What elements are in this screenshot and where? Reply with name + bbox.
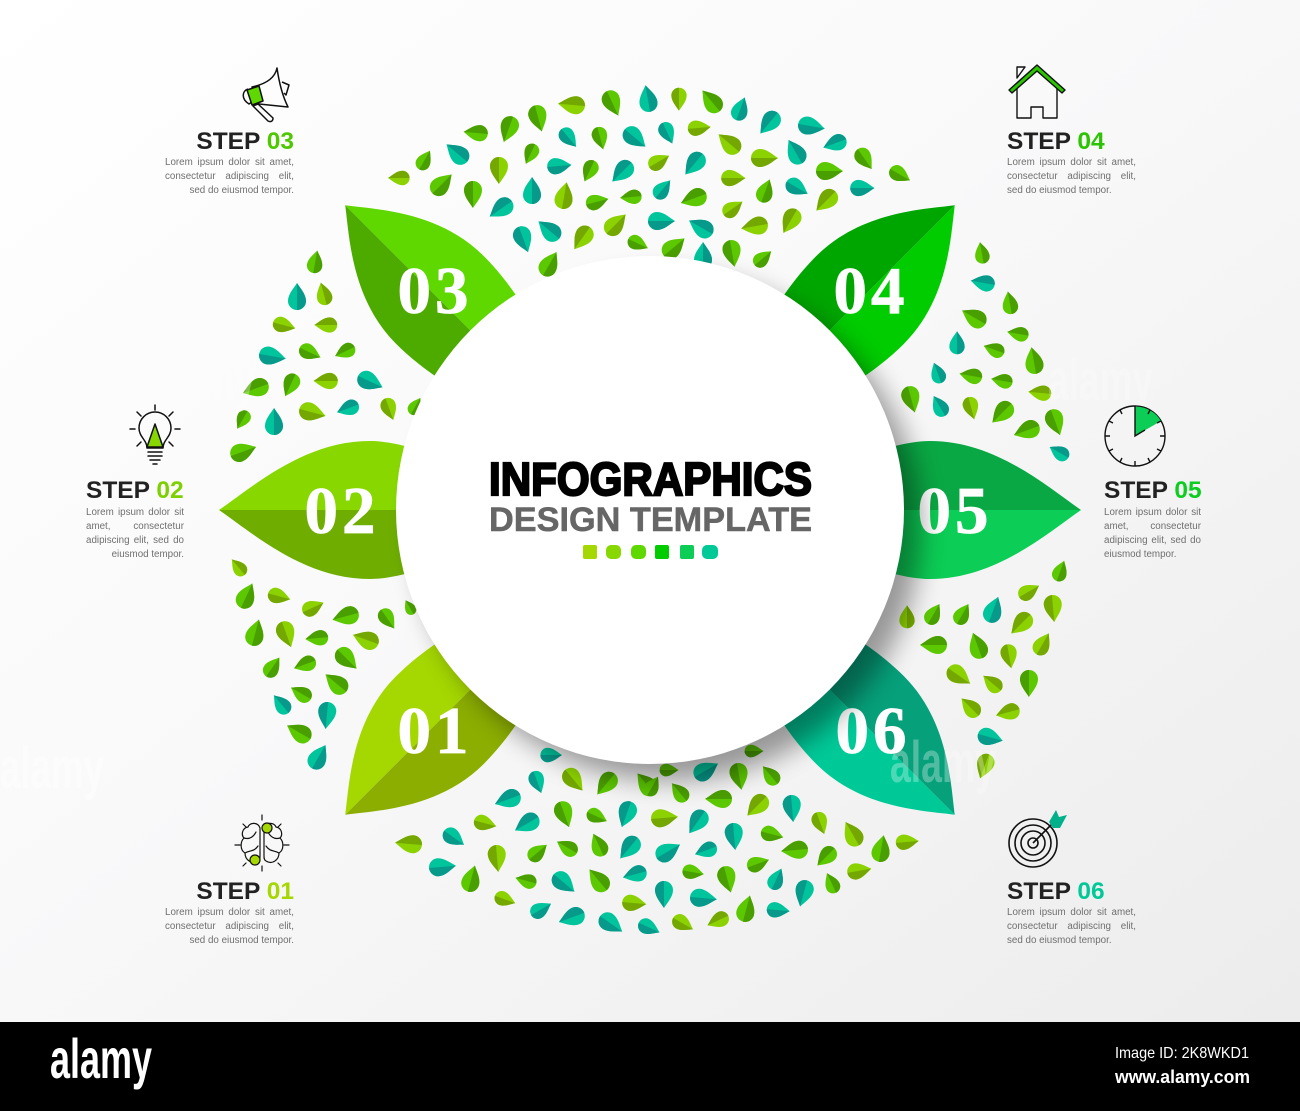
- step 05 panel: [1104, 405, 1202, 560]
- text: step 02: amet, consectetur: [86, 521, 184, 532]
- petal numbers: 03: [398, 254, 472, 328]
- text: step 04: sed do eiusmod tempor.: [1007, 185, 1112, 196]
- text: step 03: Lorem ipsum dolor sit amet,: [165, 157, 294, 168]
- heading: step 05: STEP 05: [1104, 477, 1202, 504]
- heading: step 03: STEP 03: [196, 128, 294, 155]
- petal numbers: 06: [836, 694, 910, 768]
- petal 03: [301, 161, 552, 412]
- icon: light bulb: [129, 404, 181, 465]
- icon: megaphone: [242, 67, 290, 122]
- petal numbers: 01: [398, 694, 472, 768]
- central circle: [396, 256, 904, 764]
- text: step 02: [86, 507, 184, 560]
- text: step 01: sed do eiusmod tempor.: [189, 935, 294, 946]
- heading: step 06: STEP 06: [1007, 878, 1105, 905]
- leaf cluster: upper left: [228, 249, 426, 465]
- icon: brain: [234, 814, 290, 872]
- petal 06: [748, 608, 999, 859]
- watermark: alamy: [150, 348, 255, 413]
- petal numbers: 02: [304, 474, 380, 548]
- text: step 06: consectetur adipiscing elit,: [1007, 921, 1136, 932]
- leaf cluster: top: [388, 84, 914, 280]
- step 03 panel: [165, 67, 294, 196]
- text: step 04: Lorem ipsum dolor sit amet,: [1007, 157, 1136, 168]
- text: step 01: [165, 907, 294, 946]
- text: step 02: eiusmod tempor.: [112, 549, 184, 560]
- text: step 06: [1007, 907, 1136, 946]
- petal numbers: 05: [918, 474, 992, 548]
- text: step 04: consectetur adipiscing elit,: [1007, 171, 1136, 182]
- petal 04: [748, 161, 999, 412]
- leaf cluster: bottom: [394, 745, 919, 939]
- footer band: [0, 1022, 1300, 1111]
- text: step 05: adipiscing elit, sed do: [1104, 535, 1201, 546]
- petal 02: [219, 441, 460, 579]
- leaf cluster: lower right: [899, 558, 1071, 781]
- step 02 panel: [86, 404, 184, 560]
- text: step 02: Lorem ipsum dolor sit: [86, 507, 184, 518]
- text: step 04: [1007, 157, 1136, 196]
- text: step 06: Lorem ipsum dolor sit amet,: [1007, 907, 1136, 918]
- icon: target: [1008, 810, 1067, 868]
- title: INFOGRAPHICS: [489, 453, 812, 505]
- text: step 03: consectetur adipiscing elit,: [165, 171, 294, 182]
- text: step 05: amet, consectetur: [1104, 521, 1201, 532]
- petal 05: [840, 441, 1081, 579]
- central circle shadow: [415, 275, 921, 781]
- text: step 05: eiusmod tempor.: [1104, 549, 1176, 560]
- text: step 05: Lorem ipsum dolor sit: [1104, 507, 1201, 518]
- text: step 02: adipiscing elit, sed do: [86, 535, 184, 546]
- icon: clock: [1104, 405, 1166, 467]
- step 04 panel: [1007, 64, 1136, 196]
- leaf cluster: lower left: [227, 555, 418, 773]
- title: DESIGN TEMPLATE: [489, 501, 812, 539]
- petal 01: [301, 608, 552, 859]
- watermark: alamy: [1048, 348, 1153, 413]
- text: step 06: sed do eiusmod tempor.: [1007, 935, 1112, 946]
- step 06 panel: [1007, 810, 1136, 946]
- watermark: alamy: [0, 736, 104, 801]
- leaf cluster: upper right: [899, 241, 1072, 464]
- watermark: [0, 348, 1153, 801]
- petal numbers: [304, 254, 992, 768]
- text: step 03: [165, 157, 294, 196]
- title: [489, 453, 812, 539]
- heading: step 01: STEP 01: [196, 878, 294, 905]
- text: step 01: consectetur adipiscing elit,: [165, 921, 294, 932]
- text: step 05: [1104, 507, 1201, 560]
- heading: step 04: STEP 04: [1007, 128, 1105, 155]
- text: step 03: sed do eiusmod tempor.: [189, 185, 294, 196]
- text: step 01: Lorem ipsum dolor sit amet,: [165, 907, 294, 918]
- footer band: www.alamy.com: [1114, 1067, 1250, 1087]
- heading: step 02: STEP 02: [86, 477, 184, 504]
- step 01 panel: [165, 814, 294, 946]
- footer band: alamy: [50, 1027, 152, 1090]
- watermark: alamy: [890, 730, 996, 795]
- colour dots: [583, 545, 718, 559]
- footer band: Image ID: 2K8WKD1: [1115, 1045, 1249, 1062]
- icon: house: [1008, 64, 1066, 119]
- petal numbers: 04: [834, 254, 908, 328]
